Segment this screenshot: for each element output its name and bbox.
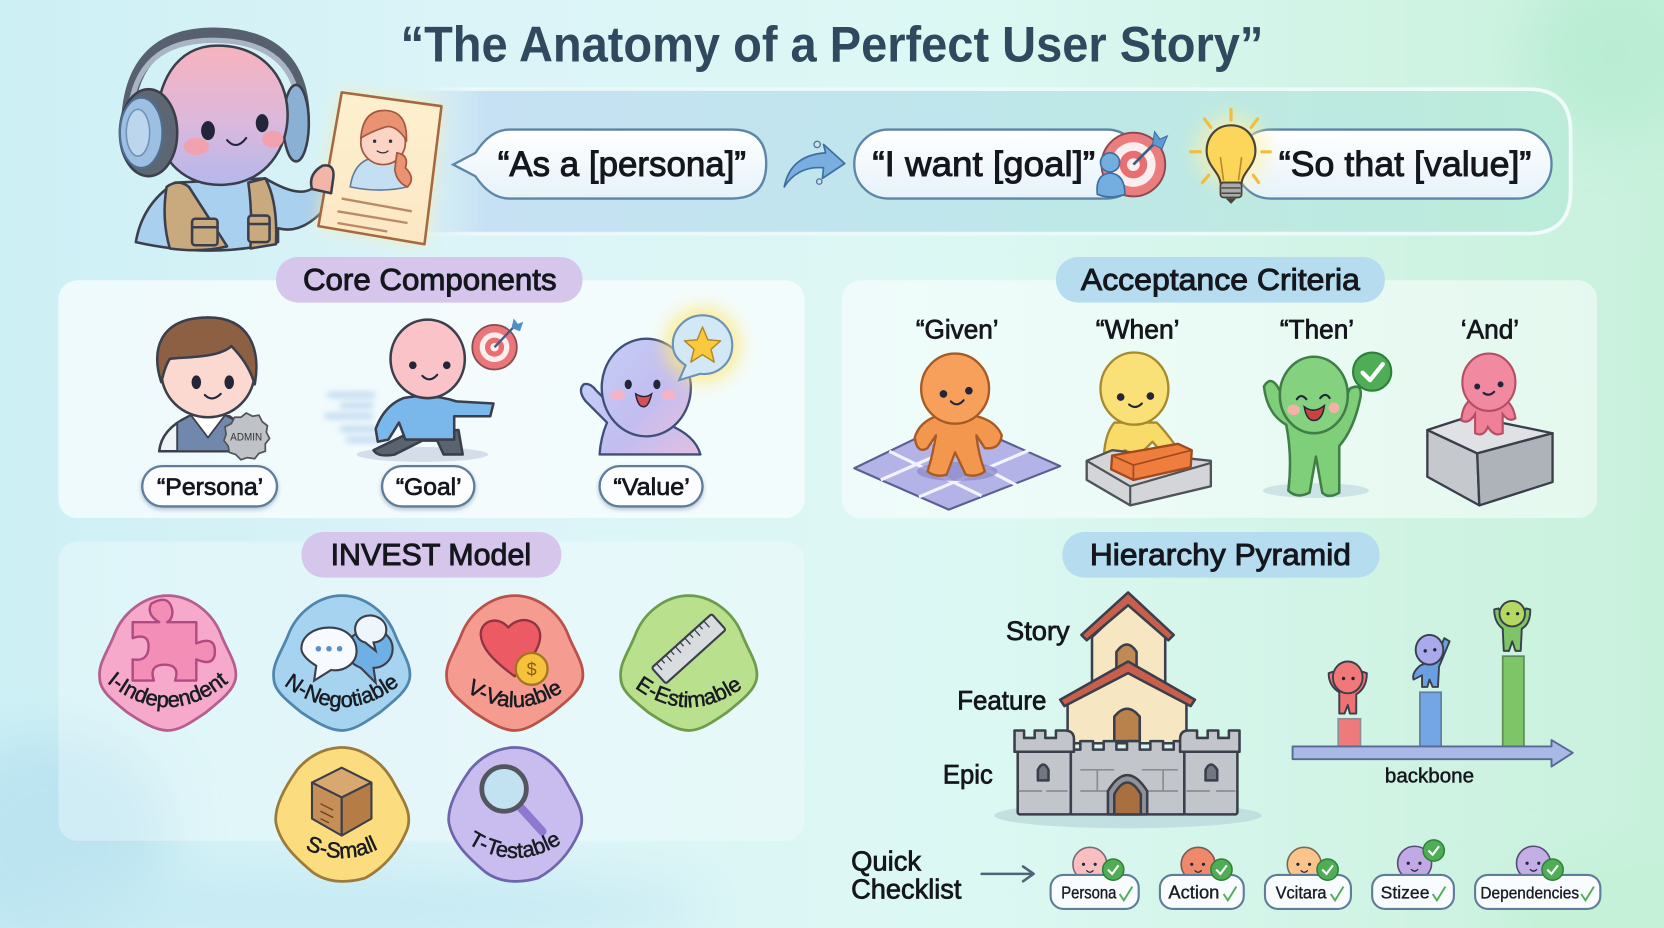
item: action: Action	[1168, 882, 1219, 902]
badge: small: S-Small	[306, 834, 378, 859]
badge: independent	[98, 594, 238, 732]
item: dependencies: Dependencies	[1480, 883, 1579, 902]
figure: value character	[581, 307, 741, 454]
figure: given on floor grid	[854, 354, 1060, 510]
torso	[136, 178, 332, 251]
badge: testable	[447, 746, 584, 883]
quick checklist	[851, 840, 1600, 909]
item: vcitara: Vcitara	[1276, 882, 1327, 902]
heading: acceptance criteria: Acceptance Criteria	[1081, 262, 1361, 297]
label: epic: Epic	[943, 760, 993, 790]
panel: invest model	[58, 532, 804, 883]
arrow: to checklist	[982, 866, 1034, 881]
icon: swoosh arrow	[784, 141, 845, 187]
persona card	[318, 92, 441, 244]
item: stizee: Stizee	[1381, 882, 1429, 902]
item: dependencies	[1475, 846, 1600, 909]
title: “The Anatomy of a Perfect User Story”	[401, 17, 1263, 73]
icon: target	[472, 319, 523, 370]
label: backbone: backbone	[1385, 766, 1474, 788]
label: feature: Feature	[957, 685, 1046, 715]
label: given: “Given’	[916, 315, 999, 345]
heading: hierarchy pyramid	[1062, 532, 1380, 578]
panel: core components	[58, 257, 804, 518]
badge: valuable	[445, 594, 584, 732]
badge: estimable	[619, 594, 758, 732]
item: persona: Persona	[1061, 882, 1117, 902]
icon: admin badge: ADMIN	[230, 432, 262, 444]
label: persona: “Persona’	[157, 474, 263, 501]
figure: green	[1494, 601, 1530, 651]
headphones band and head	[127, 34, 304, 125]
label: and: ‘And’	[1461, 315, 1519, 345]
bubble: as a persona: “As a [persona]”	[498, 145, 746, 184]
figure: blue	[1413, 635, 1450, 687]
icon: admin badge	[224, 413, 270, 460]
icon: light bulb	[1191, 109, 1270, 204]
label: story: Story	[1006, 616, 1070, 646]
bubble: as a persona	[453, 130, 766, 199]
badge: valuable: V-Valuable	[471, 678, 562, 708]
badge: negotiable: N-Negotiable	[284, 673, 398, 712]
badge: small	[274, 746, 410, 883]
label: then: “Then’	[1280, 315, 1354, 345]
icon: star speech bubble	[664, 307, 741, 383]
heading: invest model: INVEST Model	[331, 537, 531, 572]
badge: negotiable	[272, 594, 412, 732]
character: researcher with headphones holding persona card	[120, 34, 441, 251]
label: quick checklist: Quick	[851, 846, 921, 877]
badge: estimable: E-Estimable	[636, 676, 741, 708]
label: quick checklist: Checklist	[851, 873, 962, 904]
heading: hierarchy pyramid: Hierarchy Pyramid	[1090, 537, 1351, 572]
bubble: so that value	[1236, 130, 1552, 199]
label: persona	[142, 466, 277, 506]
heading: core components: Core Components	[303, 262, 557, 297]
label: when: “When’	[1096, 315, 1180, 345]
icon: check badge	[1353, 353, 1391, 391]
item: action	[1160, 847, 1244, 909]
badge: testable: T-Testable	[472, 830, 560, 858]
item: persona	[1051, 847, 1139, 909]
panel: story formula banner	[403, 89, 1571, 234]
label: value: “Value’	[613, 474, 690, 501]
figure: red	[1329, 661, 1367, 714]
badge: valuable: $	[527, 659, 537, 679]
face	[184, 138, 209, 155]
icon: target with person	[1097, 132, 1167, 197]
bubble: I want goal: “I want [goal]”	[872, 145, 1095, 184]
label: value	[600, 466, 703, 506]
figure: and on cube	[1427, 354, 1553, 505]
hand	[311, 165, 334, 193]
arrow: backbone	[1293, 740, 1573, 767]
figure: when pressing button	[1087, 353, 1211, 505]
bubble: I want goal	[854, 130, 1141, 199]
badge: independent: I-Independent	[108, 672, 229, 712]
label: goal	[382, 466, 474, 506]
label: quick checklist	[851, 846, 962, 904]
item: stizee	[1372, 840, 1454, 909]
figure: then celebrating	[1263, 353, 1391, 498]
panel: hierarchy pyramid	[943, 532, 1573, 828]
illustration: castle	[994, 592, 1262, 828]
heading: acceptance criteria	[1056, 257, 1385, 303]
bubble: so that value: “So that [value]”	[1279, 145, 1531, 184]
chart: backbone bars with figures	[1293, 601, 1573, 788]
panel: acceptance criteria	[842, 257, 1597, 518]
figure: persona admin	[157, 317, 270, 460]
heading: core components	[276, 257, 583, 303]
figure: goal runner	[327, 319, 523, 462]
item: vcitara	[1265, 847, 1351, 909]
label: goal: “Goal’	[396, 474, 462, 501]
heading: invest model	[301, 532, 561, 578]
